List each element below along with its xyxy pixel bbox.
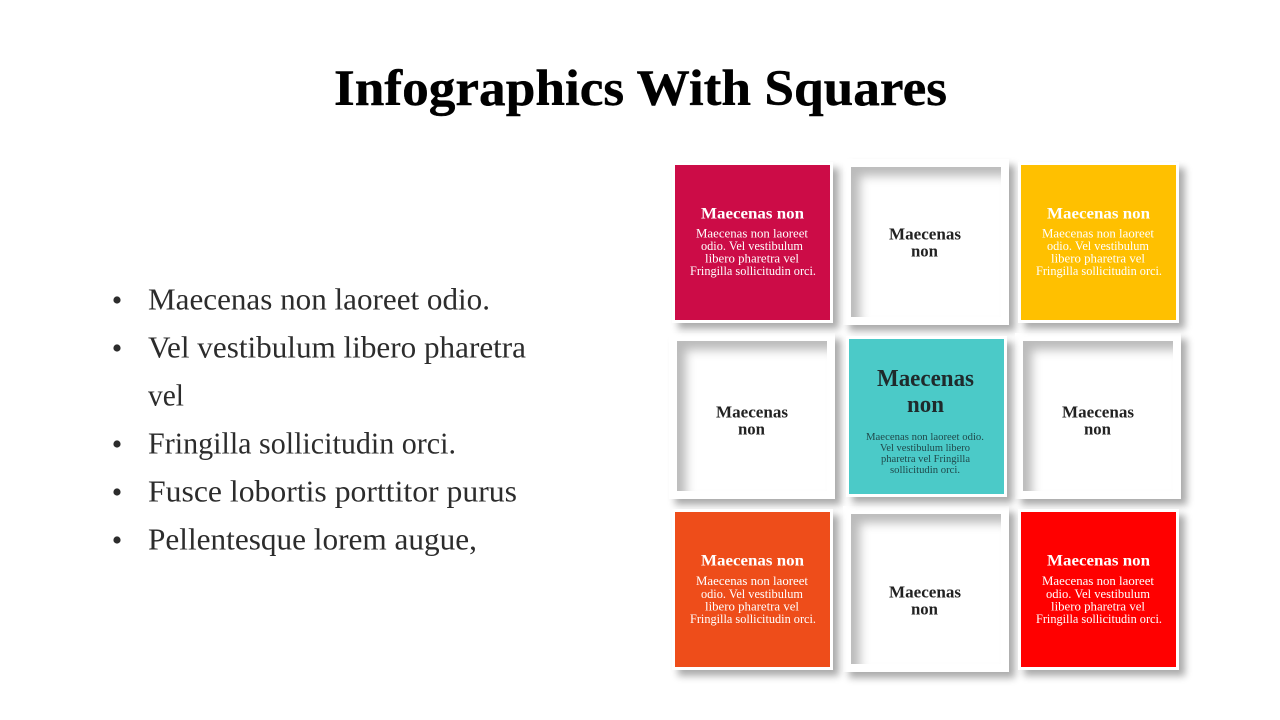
panel: white square row 2 column 3: non xyxy=(1084,420,1111,438)
panel: crimson square: odio. Vel vestibulum xyxy=(701,238,803,253)
panel: yellow square: libero pharetra vel xyxy=(1051,250,1145,266)
bullet list: Maecenas non laoreet odio. xyxy=(148,282,490,316)
bullet list xyxy=(113,282,526,556)
panel: red square: Fringilla sollicitudin orci. xyxy=(1036,611,1162,626)
bullet list: Pellentesque lorem augue, xyxy=(148,522,477,556)
panel: white square row 3 column 2: Maecenas xyxy=(889,582,962,602)
panel: red square: odio. Vel vestibulum xyxy=(1046,586,1150,601)
bullet list: vel xyxy=(148,378,184,412)
panel: white square row 3 column 2 xyxy=(843,506,1009,672)
panel: red square xyxy=(1018,509,1179,670)
panel: teal center square: Vel vestibulum libero xyxy=(880,443,970,454)
panel: teal center square: Maecenas non laoreet odio. xyxy=(866,432,984,443)
panel: yellow square: odio. Vel vestibulum xyxy=(1047,238,1149,253)
panel: white square row 3 column 2: non xyxy=(911,600,938,618)
panel: white square row 1 column 2 xyxy=(843,159,1009,325)
panel: teal center square: sollicitudin orci. xyxy=(890,465,960,476)
panel: teal center square xyxy=(846,336,1007,497)
panel: crimson square: Maecenas non xyxy=(701,206,804,222)
panel: white square row 2 column 1: non xyxy=(738,420,765,438)
bullet list: Vel vestibulum libero pharetra xyxy=(148,330,526,364)
panel: red square: Maecenas non laoreet xyxy=(1042,573,1154,588)
panel: white square row 1 column 2: non xyxy=(911,242,938,260)
panel: red square: Maecenas non xyxy=(1047,552,1150,570)
panel: orange square: Fringilla sollicitudin orci. xyxy=(690,611,816,626)
panel: crimson square: Fringilla sollicitudin orci. xyxy=(690,263,816,278)
bullet list: Fringilla sollicitudin orci. xyxy=(148,426,456,460)
panel: white square row 2 column 1 xyxy=(669,333,835,499)
panel: orange square: Maecenas non xyxy=(701,552,804,570)
panel: white square row 2 column 1: Maecenas xyxy=(716,402,789,422)
title: Infographics With Squares xyxy=(334,61,947,117)
panel: orange square: odio. Vel vestibulum xyxy=(701,586,803,601)
panel: orange square: Maecenas non laoreet xyxy=(696,573,808,588)
panel: teal center square: Maecenas xyxy=(877,366,974,392)
panel: yellow square: Maecenas non xyxy=(1047,206,1150,222)
panel: yellow square xyxy=(1018,162,1179,323)
panel: teal center square: non xyxy=(907,392,944,418)
panel: crimson square: libero pharetra vel xyxy=(705,250,799,266)
panel: orange square: libero pharetra vel xyxy=(705,598,799,614)
panel: red square: libero pharetra vel xyxy=(1051,598,1145,614)
panel: yellow square: Fringilla sollicitudin orci. xyxy=(1036,263,1162,278)
panel: teal center square: pharetra vel Fringilla xyxy=(881,454,970,465)
panel: crimson square: Maecenas non laoreet xyxy=(696,226,808,240)
panel: crimson square xyxy=(672,162,833,323)
panel: white square row 2 column 3: Maecenas xyxy=(1062,402,1135,422)
panel: white square row 1 column 2: Maecenas xyxy=(889,224,962,244)
panel: white square row 2 column 3 xyxy=(1015,333,1181,499)
panel: orange square xyxy=(672,509,833,670)
panel: yellow square: Maecenas non laoreet xyxy=(1042,226,1154,240)
bullet list: Fusce lobortis porttitor purus xyxy=(148,474,517,508)
